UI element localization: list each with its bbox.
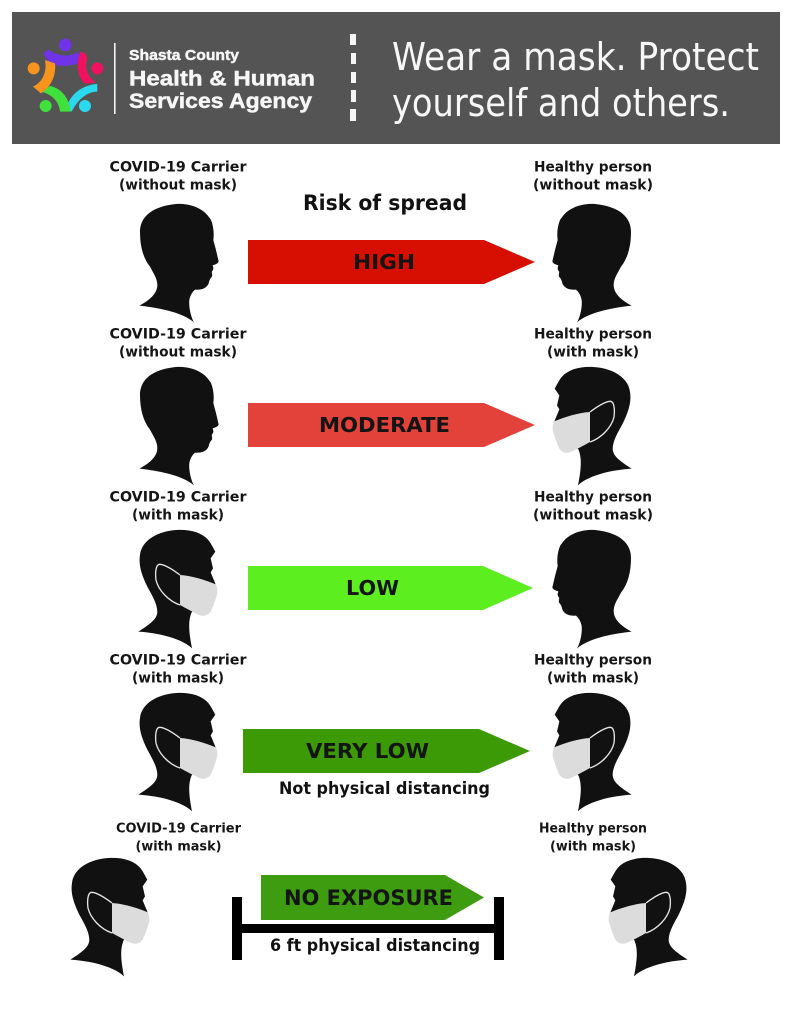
icon: carrier head with mask <box>138 530 217 648</box>
healthy person label: Healthy person <box>534 160 652 176</box>
carrier label: COVID-19 Carrier <box>110 326 247 342</box>
carrier label: (with mask) <box>132 670 224 686</box>
carrier label: (with mask) <box>136 838 222 854</box>
agency name <box>129 47 315 113</box>
icon: healthy head without mask <box>552 530 632 648</box>
row 4: very low risk <box>110 652 652 811</box>
healthy person label <box>539 820 647 854</box>
healthy person label: Healthy person <box>534 652 652 668</box>
agency name: Services Agency <box>129 90 312 113</box>
note: 6 ft physical distancing: 6 ft physical distancing <box>270 936 480 956</box>
healthy person label: Healthy person <box>534 326 652 342</box>
row 2: moderate risk <box>110 326 652 485</box>
arrow: very low: VERY LOW <box>306 739 429 763</box>
headline: Wear a mask. Protect <box>392 35 759 80</box>
arrow: low: LOW <box>346 576 399 600</box>
healthy person label <box>534 652 652 686</box>
carrier label <box>110 490 247 524</box>
healthy person label <box>533 160 653 194</box>
icon: carrier head with mask <box>138 693 217 811</box>
row 1: high risk <box>110 160 653 322</box>
carrier label: COVID-19 Carrier <box>110 490 247 506</box>
healthy person label: (with mask) <box>547 344 639 360</box>
icon: carrier head without mask <box>139 204 219 322</box>
distance bracket <box>232 897 504 960</box>
heading: risk of spread: Risk of spread <box>303 191 467 216</box>
agency name: Shasta County <box>129 47 240 64</box>
agency name: Health & Human <box>129 68 315 90</box>
arrow: high: HIGH <box>353 250 415 274</box>
healthy person label: (with mask) <box>550 838 636 854</box>
row 3: low risk <box>110 490 653 648</box>
note: not physical distancing: Not physical distancing <box>279 779 490 799</box>
healthy person label: (without mask) <box>533 178 653 194</box>
logo divider <box>114 43 116 114</box>
healthy person label: (without mask) <box>533 508 653 524</box>
headline <box>392 35 759 126</box>
carrier label <box>110 160 247 194</box>
headline: yourself and others. <box>392 81 730 126</box>
healthy person label: Healthy person <box>539 820 647 836</box>
carrier label: COVID-19 Carrier <box>116 820 241 836</box>
arrow: no exposure <box>261 875 484 920</box>
icon: healthy head with mask <box>553 693 632 811</box>
healthy person label <box>534 326 652 360</box>
arrow: high <box>248 240 535 284</box>
icon: healthy head with mask <box>609 858 688 976</box>
carrier label <box>110 326 247 360</box>
dashed divider <box>350 34 356 121</box>
logo: Shasta County figures <box>28 39 103 112</box>
carrier label: COVID-19 Carrier <box>110 160 247 176</box>
carrier label <box>110 652 247 686</box>
arrow: no exposure: NO EXPOSURE <box>284 886 453 911</box>
carrier label <box>116 820 241 854</box>
carrier label: (without mask) <box>119 344 237 360</box>
arrow: moderate <box>248 403 535 447</box>
icon: carrier head without mask <box>139 367 219 485</box>
icon: healthy head without mask <box>552 204 632 322</box>
row 5: no exposure <box>70 820 688 976</box>
icon: healthy head with mask <box>553 367 632 485</box>
carrier label: (with mask) <box>132 508 224 524</box>
arrow: moderate: MODERATE <box>319 413 450 437</box>
header banner <box>12 12 780 144</box>
healthy person label: (with mask) <box>547 670 639 686</box>
healthy person label <box>533 490 653 524</box>
carrier label: (without mask) <box>119 178 237 194</box>
icon: carrier head with mask <box>70 858 149 976</box>
healthy person label: Healthy person <box>534 490 652 506</box>
arrow: low <box>248 566 533 610</box>
carrier label: COVID-19 Carrier <box>110 652 247 668</box>
arrow: very low <box>243 729 530 773</box>
